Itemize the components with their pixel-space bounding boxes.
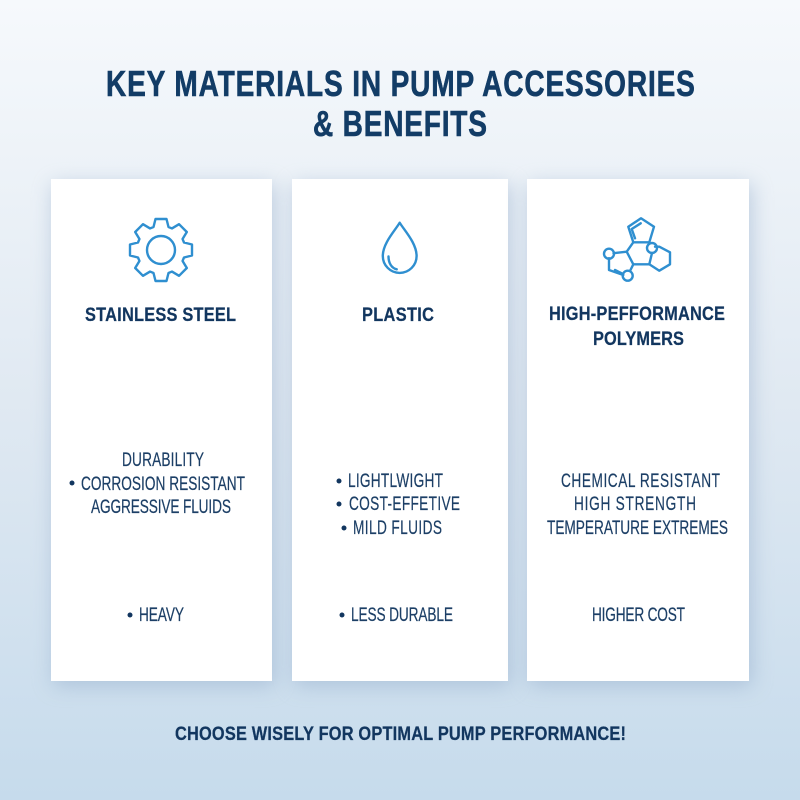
- heading: high-performance polymers: [549, 303, 725, 349]
- drawback: stainless steel: HEAVY: [139, 604, 184, 626]
- benefits: plastic: MILD FLUIDS: [353, 517, 442, 539]
- benefits: high-performance polymers: TEMPERATURE EXTREMES: [547, 517, 728, 539]
- heading: high-performance polymers: POLYMERS: [593, 328, 684, 349]
- benefits: plastic: COST-EFFETIVE: [349, 493, 460, 515]
- heading: plastic: PLASTIC: [362, 304, 434, 325]
- title: KEY MATERIALS IN PUMP ACCESSORIES: [106, 64, 695, 104]
- benefits: stainless steel: AGGRESSIVE FLUIDS: [91, 496, 231, 518]
- title: [106, 64, 695, 144]
- heading: stainless steel: STAINLESS STEEL: [85, 304, 236, 325]
- benefits: plastic: LIGHTLWIGHT: [348, 470, 443, 492]
- footer tagline: CHOOSE WISELY FOR OPTIMAL PUMP PERFORMANCE!: [175, 723, 626, 744]
- panel: plastic: [292, 179, 511, 686]
- benefits: high-performance polymers: CHEMICAL RESISTANT: [561, 470, 720, 492]
- panel: stainless steel: [51, 179, 275, 686]
- heading: high-performance polymers: HIGH-PEFFORMANCE: [549, 303, 725, 324]
- panel: high-performance polymers: [527, 179, 752, 686]
- benefits: stainless steel: [70, 449, 245, 518]
- icon: molecule: [604, 218, 670, 281]
- title: & BENEFITS: [313, 104, 487, 144]
- benefits: high-performance polymers: [547, 470, 728, 539]
- benefits: high-performance polymers: HIGH STRENGTH: [574, 493, 696, 515]
- icon: water drop: [383, 223, 417, 273]
- benefits: stainless steel: DURABILITY: [122, 449, 204, 471]
- icon: gear: [130, 219, 192, 281]
- drawback: plastic: LESS DURABLE: [351, 604, 453, 626]
- drawback: high-performance polymers: HIGHER COST: [592, 604, 685, 626]
- benefits: stainless steel: CORROSION RESISTANT: [81, 473, 245, 495]
- benefits: plastic: [336, 470, 460, 539]
